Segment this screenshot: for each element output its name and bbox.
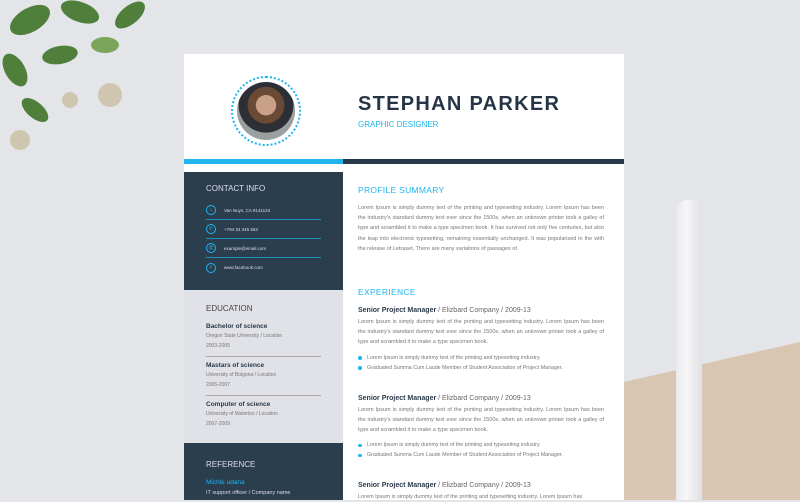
sidebar: education: Bachelor of science bbox=[206, 323, 267, 330]
sidebar: education: Mastars of science bbox=[206, 362, 264, 369]
sidebar: contact: Van Nuys, CA 9141123 bbox=[224, 208, 270, 212]
job 2: Lorem Ipsum is simply dummy text of the printing and typesetting industry. Lorem Ipsum has been the industry's standard dummy text ever since the 1500s, when an unknown printer took a galley of type and scrambled it to make a type specimen book. bbox=[358, 407, 604, 433]
sidebar: education: Oregon State University / Location bbox=[206, 333, 282, 339]
profile summary bbox=[358, 185, 604, 252]
sidebar: reference bbox=[184, 443, 343, 500]
sidebar: education: EDUCATION bbox=[206, 304, 253, 313]
job 2: Lorem Ipsum is simply dummy text of the printing and typesetting industry. bbox=[367, 442, 541, 448]
sidebar: contact: ⌂ bbox=[209, 207, 213, 213]
resume page: GRAPHIC DESIGNER bbox=[358, 120, 438, 129]
sidebar: education bbox=[184, 290, 343, 443]
sidebar: education: 2007-2009 bbox=[206, 421, 230, 427]
sidebar: education: Computer of science bbox=[206, 401, 270, 408]
sidebar: reference: REFERENCE bbox=[206, 460, 255, 469]
sidebar: education: 2003-2005 bbox=[206, 343, 230, 349]
experience bbox=[358, 287, 604, 500]
sidebar: contact: f bbox=[210, 264, 212, 270]
sidebar: contact: +794 34 345 563 bbox=[224, 226, 258, 232]
profile summary: PROFILE SUMMARY bbox=[358, 185, 445, 195]
sidebar: education: 2005-2007 bbox=[206, 382, 230, 388]
pole bbox=[676, 200, 702, 500]
profile summary: Lorem Ipsum is simply dummy text of the printing and typesetting industry. Lorem Ipsum has been the industry's standard dummy text ever since the 1500s, when an unknown printer took a galley of type and scrambled it to make a type specimen book. It has survived not only five centuries, but also the leap into electronic typesetting, remaining essentially unchanged. It was popularised in the with the release of Letraset, There are many variations of passages of. bbox=[358, 205, 604, 252]
job 3: Senior Project Manager / Elizbard Company / 2009-13 bbox=[358, 482, 531, 489]
job 1: Senior Project Manager / Elizbard Company / 2009-13 bbox=[358, 307, 531, 314]
sidebar: reference: IT support officer / Company name bbox=[206, 490, 290, 496]
experience: EXPERIENCE bbox=[358, 287, 416, 297]
job 3: Lorem Ipsum is simply dummy text of the printing and typesetting industry. Lorem Ipsum has bbox=[358, 494, 582, 500]
sidebar: education: University of Bolgona / Location bbox=[206, 372, 276, 378]
job 1: Lorem Ipsum is simply dummy text of the printing and typesetting industry. bbox=[367, 355, 541, 361]
sidebar: contact: ✆ bbox=[209, 226, 213, 232]
job 2: Graduated Summa Cum Laude Member of Student Association of Project Manager. bbox=[367, 452, 563, 458]
job 2: Senior Project Manager / Elizbard Company / 2009-13 bbox=[358, 395, 531, 402]
header bars bbox=[184, 159, 343, 164]
job 1 bbox=[358, 306, 604, 371]
job 2 bbox=[358, 394, 604, 458]
sidebar: contact: example@email.com bbox=[224, 246, 266, 250]
job 1: Graduated Summa Cum Laude Member of Student Association of Project Manager. bbox=[367, 365, 563, 371]
job 1: Lorem Ipsum is simply dummy text of the printing and typesetting industry. Lorem Ipsum has been the industry's standard dummy text ever since the 1500s, when an unknown printer took a galley of type and scrambled it to make a type specimen book. bbox=[358, 319, 604, 345]
resume page bbox=[184, 54, 624, 500]
sidebar: contact: @ bbox=[208, 245, 214, 251]
plant decoration bbox=[2, 0, 145, 150]
sidebar: contact bbox=[184, 172, 343, 290]
sidebar: contact: www.facebook.com bbox=[224, 265, 263, 270]
sidebar: contact: CONTACT INFO bbox=[206, 184, 265, 193]
header: photo bbox=[231, 76, 301, 146]
job 3 bbox=[358, 482, 582, 500]
header: name: STEPHAN PARKER bbox=[358, 93, 560, 115]
sidebar: reference: Michle udana bbox=[206, 479, 245, 486]
sidebar: education: University of Waterloo / Location bbox=[206, 411, 278, 417]
